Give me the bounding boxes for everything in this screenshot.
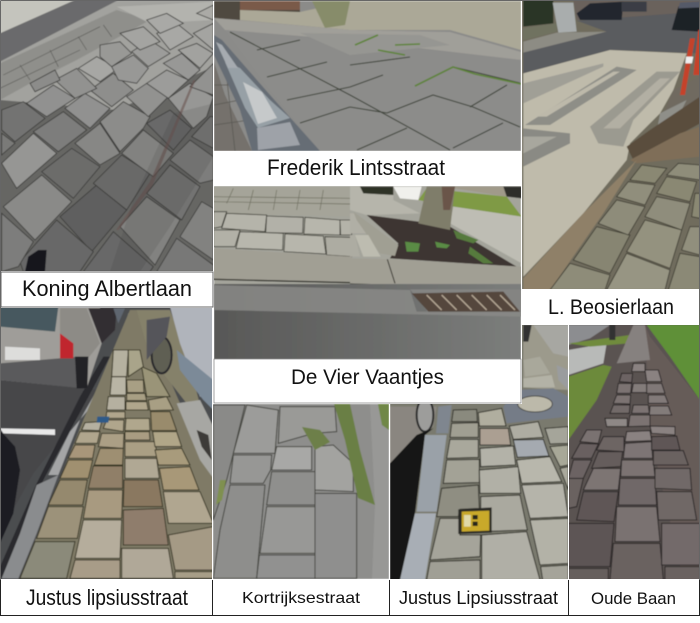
label: L. Beosierlaan bbox=[522, 290, 699, 324]
label: Koning Albertlaan bbox=[1, 272, 213, 307]
photo: Koning Albertlaan paving bbox=[0, 0, 215, 273]
label: Frederik Lintsstraat bbox=[214, 152, 521, 185]
label: Oude Baan: Oude Baan bbox=[591, 589, 676, 608]
label: Justus Lipsiusstraat: Justus Lipsiusstraat bbox=[399, 588, 558, 608]
label: Justus Lipsiusstraat bbox=[390, 580, 568, 616]
label: Justus lipsiusstraat bbox=[1, 580, 213, 616]
photo: Justus Lipsiusstraat gold utility box bbox=[390, 323, 568, 580]
label: De Vier Vaantjes bbox=[214, 359, 521, 403]
photo: Oude Baan path between grass bbox=[568, 323, 700, 580]
label: Justus lipsiusstraat: Justus lipsiusstraat bbox=[26, 585, 188, 610]
photo: Frederik Lintsstraat paving bbox=[214, 1, 521, 151]
label: Oude Baan bbox=[569, 580, 699, 616]
label: Frederik Lintsstraat: Frederik Lintsstraat bbox=[267, 155, 445, 180]
label: L. Beosierlaan: L. Beosierlaan bbox=[548, 296, 674, 319]
photo: Justus lipsiusstraat pavement and cars bbox=[0, 307, 213, 582]
photo: L. Beosierlaan concrete apron bbox=[522, 0, 700, 290]
label: De Vier Vaantjes: De Vier Vaantjes bbox=[291, 366, 444, 389]
label: Koning Albertlaan: Koning Albertlaan bbox=[22, 276, 192, 301]
label: Kortrijksestraat bbox=[213, 580, 389, 616]
label: Kortrijksestraat: Kortrijksestraat bbox=[242, 590, 361, 607]
photo: Kortrijksestraat paving bbox=[213, 404, 389, 579]
photo: De Vier Vaantjes kerb and tree bbox=[213, 186, 522, 359]
